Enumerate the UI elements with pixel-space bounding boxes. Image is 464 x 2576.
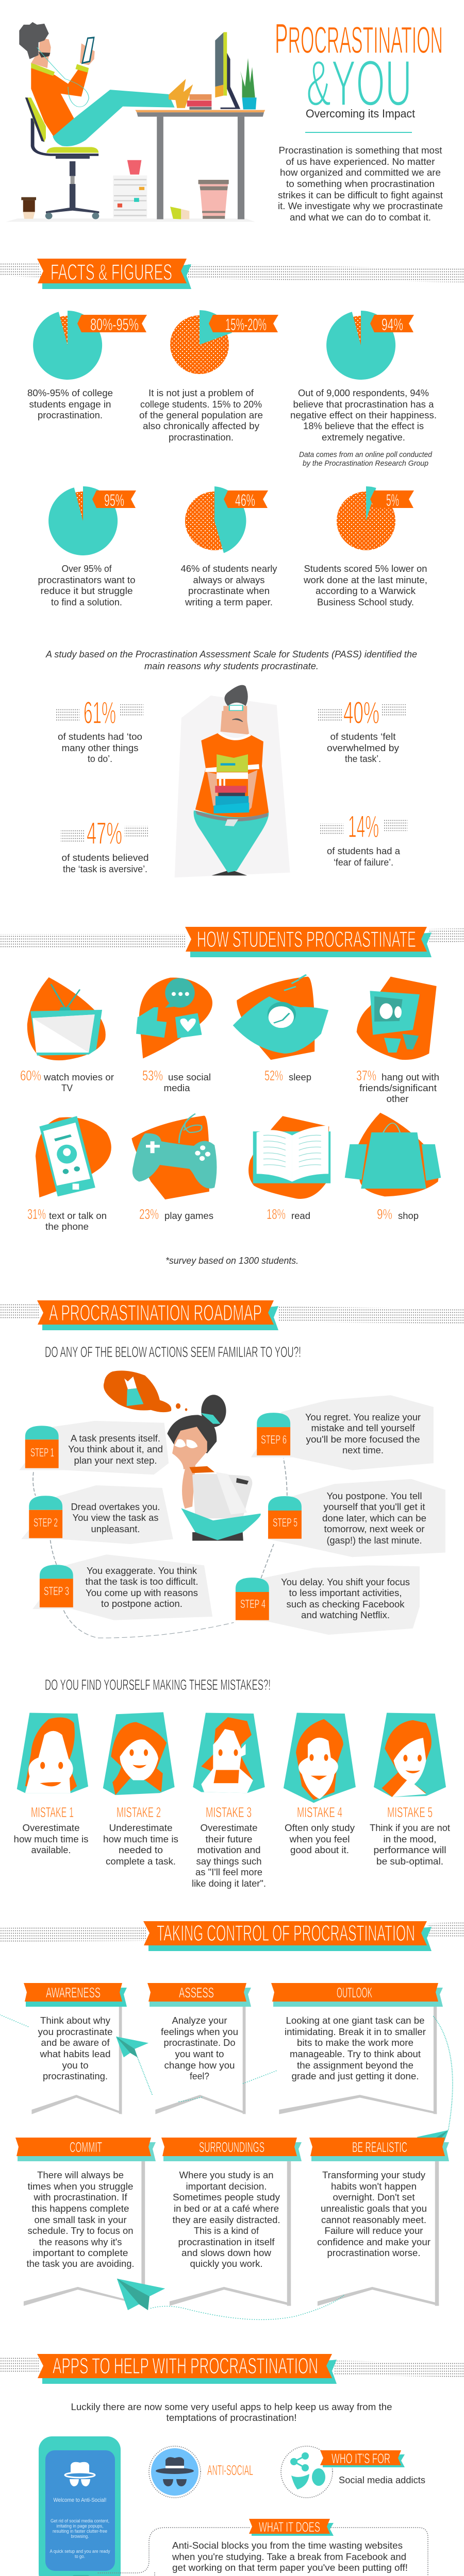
tip: Surroundings: SURROUNDINGS <box>199 2139 264 2155</box>
portrait 3 <box>193 1713 265 1793</box>
what it does: Anti-Social blocks you from the time wasting websites <box>172 2540 403 2551</box>
caption: 95%: to find a solution. <box>51 597 122 607</box>
step labels: STEP 5 <box>273 1516 297 1529</box>
step 4 text: to less important activities, <box>289 1588 402 1598</box>
caption: 15%-20%: of the general population are <box>139 410 263 420</box>
step 1 text: You think about it, and <box>68 1444 163 1454</box>
activity labels: use social <box>168 1072 211 1082</box>
tip: Awareness: Think about why <box>40 2015 110 2026</box>
mistake 5: MISTAKE 5 <box>387 1804 433 1820</box>
tip: Surroundings: quickly you work. <box>190 2259 263 2269</box>
caption: 80%-95%: procrastination. <box>38 410 103 420</box>
apps intro <box>71 2402 392 2423</box>
tip: Commit: with procrastination. If <box>33 2192 128 2202</box>
pie: 94%: 94% <box>382 315 403 334</box>
tip: Be Realistic: Transforming your study <box>322 2170 425 2180</box>
step markers <box>25 1413 302 1620</box>
tip: Outlook: grade and just getting it done. <box>292 2071 419 2081</box>
stat: 61%: 61% <box>84 696 116 730</box>
tip: Surroundings: Where you study is an <box>179 2170 273 2180</box>
activity labels: 31% <box>27 1206 46 1222</box>
step 3 text: to postpone action. <box>101 1599 183 1609</box>
mistake 3: like doing it later". <box>192 1878 266 1889</box>
step labels: STEP 6 <box>261 1433 287 1446</box>
portrait 4 <box>284 1713 356 1803</box>
tip: Outlook: intimidating. Break it in to smaller <box>285 2027 426 2037</box>
activity labels: shop <box>398 1211 419 1221</box>
intro text: and what we can do to combat it. <box>290 212 431 223</box>
tip: Commit: this happens complete <box>32 2204 129 2214</box>
icon: game controller <box>131 1114 217 1199</box>
step 1 text: A task presents itself. <box>71 1433 160 1444</box>
tip: Commit: important to complete <box>33 2248 128 2258</box>
source note: by the Procrastination Research Group <box>303 459 428 468</box>
intro text: to something when procrastination <box>286 179 435 189</box>
step 5 text: (gasp!) the last minute. <box>327 1535 422 1546</box>
mistake 2: needed to <box>119 1845 163 1855</box>
section banner: A Procrastination Roadmap <box>37 1300 278 1330</box>
caption: 95%: Over 95% of <box>62 564 112 574</box>
icon: spy app logo <box>149 2446 201 2498</box>
mistake 3 <box>192 1804 266 1889</box>
activity labels <box>20 1067 439 1232</box>
pie: 15%-20% <box>170 310 278 374</box>
caption: 46%: 46% of students nearly <box>180 564 277 574</box>
illustration: overwhelmed student holding books <box>175 685 290 877</box>
tip: Awareness <box>24 1983 127 2081</box>
icon: open book <box>248 1116 330 1199</box>
activity labels: text or talk on <box>49 1211 107 1221</box>
tip: Awareness: AWARENESS <box>46 1985 101 2001</box>
caption: 94%: Out of 9,000 respondents, 94% <box>298 388 429 398</box>
tip: Awareness: procrastinating. <box>43 2071 108 2081</box>
section banner: Apps to Help with Procrastination <box>37 2353 337 2384</box>
tip: Outlook: bits to make the work more <box>297 2038 413 2048</box>
activity labels: watch movies or <box>43 1072 114 1082</box>
tip: Surroundings: Sometimes people study <box>173 2192 280 2202</box>
tip: Commit: schedule. Try to focus on <box>28 2226 133 2236</box>
caption: 5%: Students scored 5% lower on <box>304 564 427 574</box>
activity labels: read <box>291 1211 310 1221</box>
stat: 47%: the ‘task is aversive’. <box>63 864 147 874</box>
mistake 3: as "I'll feel more <box>195 1867 262 1877</box>
phone screenshot: to go. <box>75 2554 85 2559</box>
tip: Be Realistic: Failure will reduce your <box>325 2226 423 2236</box>
pie: 80%-95%: 80%-95% <box>90 315 139 334</box>
stat: 40%: of students ‘felt <box>330 732 396 742</box>
step 6 text <box>305 1412 421 1455</box>
tip: Be Realistic: procrastination worse. <box>327 2248 421 2258</box>
stat: 61% <box>55 696 143 764</box>
mistake 2: Underestimate <box>109 1823 172 1833</box>
tip: Be Realistic: habits won't happen <box>331 2181 417 2192</box>
survey note: *survey based on 1300 students. <box>165 1256 299 1266</box>
step 3 text: that the task is too difficult. <box>86 1577 198 1587</box>
stat: 40%: the task’. <box>345 754 381 764</box>
study intro <box>45 649 417 671</box>
study intro: A study based on the Procrastination Assessment Scale for Students (PASS) identified the <box>45 649 417 659</box>
what it does: when you're studying. Take a break from Facebook and <box>172 2552 406 2562</box>
mistake 5: be sub-optimal. <box>376 1856 443 1867</box>
caption: 15%-20% <box>139 388 263 443</box>
step 2 text: You view the task as <box>72 1513 159 1523</box>
step 5 text: tomorrow, next week or <box>324 1524 425 1534</box>
stat: 40%: overwhelmed by <box>327 743 399 753</box>
caption: 5%: Business School study. <box>317 597 414 607</box>
tip: Awareness: you to <box>62 2060 89 2071</box>
icon: shopping bags <box>345 1113 441 1196</box>
step 4 text: such as checking Facebook <box>287 1599 405 1609</box>
icon: television <box>27 977 106 1060</box>
tip: Assess: procrastinate. Do <box>164 2038 235 2048</box>
tip: Be Realistic: BE REALISTIC <box>352 2139 407 2155</box>
step 4 text: and watching Netflix. <box>301 1610 390 1620</box>
mistake 5: in the mood, <box>384 1834 436 1844</box>
caption: 46% <box>180 564 277 607</box>
icon: paper plane two <box>417 2130 449 2151</box>
step labels <box>30 1433 297 1611</box>
activity labels: 52% <box>264 1067 283 1083</box>
step 6 text: You regret. You realize your <box>305 1412 421 1422</box>
bookmark frames with paper plane path <box>0 2007 453 2319</box>
pie: 94% <box>326 311 414 380</box>
stat: 61%: of students had ‘too <box>58 732 142 742</box>
tip: Commit: COMMIT <box>70 2139 102 2155</box>
tip: Commit: one small task in your <box>34 2215 127 2225</box>
tip: Be Realistic: cannot reasonably meet. <box>321 2215 426 2225</box>
tip: Assess: ASSESS <box>179 1985 214 2001</box>
tip: Outlook: manageable. Try to think about <box>290 2049 421 2059</box>
stat: 47%: 47% <box>87 816 122 851</box>
activity labels: 18% <box>267 1206 286 1222</box>
illustration: girl with laptop and steps backgrounds <box>19 1370 445 1638</box>
stat: 40% <box>318 696 406 764</box>
step 4 text <box>281 1577 410 1620</box>
tip: Outlook <box>271 1983 443 2081</box>
step labels: STEP 3 <box>44 1584 69 1598</box>
stat: 14%: of students had a <box>327 846 401 856</box>
apps intro: Luckily there are now some very useful apps to help keep us away from the <box>71 2402 392 2412</box>
step 2 text: unpleasant. <box>91 1524 140 1534</box>
tip: Assess: feel? <box>190 2071 209 2081</box>
caption: 15%-20%: procrastination. <box>169 432 234 443</box>
what it does: get working on that term paper you've been putting off! <box>172 2563 408 2573</box>
step 5 text: You postpone. You tell <box>327 1491 422 1501</box>
caption: 94%: believe that procrastination has a <box>293 399 435 410</box>
mistake 5 <box>370 1804 450 1867</box>
intro text: of us have experienced. No matter <box>286 157 435 167</box>
caption: 5%: work done at the last minute, <box>303 575 427 585</box>
who it's for: Social media addicts <box>339 2475 425 2485</box>
source note: Data comes from an online poll conducted <box>299 450 433 459</box>
icons: how students procrastinate <box>27 975 441 1199</box>
subtitle: Overcoming its Impact <box>306 107 415 120</box>
step 2 text: Dread overtakes you. <box>71 1502 160 1512</box>
caption: 80%-95%: 80%-95% of college <box>27 388 113 398</box>
tip: Assess: change how you <box>164 2060 235 2071</box>
caption: 95%: procrastinators want to <box>38 575 135 585</box>
caption: 15%-20%: college students. 15% to 20% <box>140 399 262 410</box>
pie: 5% <box>337 486 414 550</box>
caption: 15%-20%: also chronically affected by <box>143 421 259 431</box>
mistake 2 <box>103 1804 178 1867</box>
mistake 3: their future <box>205 1834 253 1844</box>
step 4 text: You delay. You shift your focus <box>281 1577 410 1587</box>
icon: social media <box>136 977 212 1058</box>
tip: Surroundings: This is a kind of <box>194 2226 259 2236</box>
stat: 40%: 40% <box>343 696 379 730</box>
mistake 5: Think if you are not <box>370 1823 450 1833</box>
stat: 14% <box>319 809 407 868</box>
portrait 5 <box>374 1713 446 1797</box>
phone screenshot <box>39 2436 121 2576</box>
activity labels: media <box>164 1083 191 1093</box>
activity labels: 9% <box>377 1206 392 1222</box>
stat: 47%: of students believed <box>62 853 148 863</box>
mistake 4 <box>285 1804 355 1855</box>
app: Anti-Social <box>39 2436 428 2576</box>
mistake 4: good about it. <box>290 1845 349 1855</box>
tip: Awareness: you procrastinate <box>38 2027 112 2037</box>
mistake 4: MISTAKE 4 <box>297 1804 342 1820</box>
tip: Outlook: the assignment beyond the <box>297 2060 413 2071</box>
tip: Surroundings: important decision. <box>186 2181 267 2192</box>
stat: 61%: to do’. <box>88 754 112 764</box>
mistake 1: Overestimate <box>23 1823 79 1833</box>
mistake 4: when you feel <box>289 1834 350 1844</box>
step 2 text <box>71 1502 160 1534</box>
portraits: five mistake faces <box>17 1712 446 1803</box>
phone screenshot: irritating in page popups, <box>57 2523 103 2529</box>
mistake 2: how much time is <box>103 1834 178 1844</box>
step 5 text: yourself that you'll get it <box>324 1502 425 1512</box>
section banner: Facts & Figures <box>37 259 191 289</box>
step 3 text: You come up with reasons <box>86 1588 198 1598</box>
step 6 text: you'll be more focused the <box>306 1434 420 1445</box>
caption: 94%: 18% believe that the effect is <box>303 421 424 431</box>
apps intro: temptations of procrastination! <box>166 2413 297 2423</box>
step labels: STEP 4 <box>240 1597 266 1611</box>
pie: 46%: 46% <box>235 491 255 510</box>
phone screenshot: Get rid of social media content, <box>51 2518 109 2523</box>
what it does <box>98 2519 428 2576</box>
step labels: STEP 2 <box>34 1516 58 1529</box>
tip: Surroundings: in bed or at a café where <box>174 2204 279 2214</box>
study intro: main reasons why students procrastinate. <box>144 661 319 671</box>
stat: 14%: ‘fear of failure’. <box>334 857 393 868</box>
tip: Assess: feelings when you <box>161 2027 238 2037</box>
tip: Surroundings <box>161 2138 302 2269</box>
caption: 80%-95%: students engage in <box>29 399 111 410</box>
tip: Commit: the reasons why it's <box>39 2237 122 2247</box>
tip: Awareness: what habits lead <box>39 2049 110 2059</box>
activity labels: friends/significant <box>359 1083 437 1093</box>
intro text <box>278 145 443 223</box>
step 6 text: next time. <box>342 1445 384 1455</box>
tip: Assess: Analyze your <box>172 2015 227 2026</box>
phone screenshot: Welcome to Anti-Social! <box>54 2497 106 2503</box>
mistake 2: MISTAKE 2 <box>117 1804 161 1820</box>
icon: pillow and alarm clock <box>233 975 328 1060</box>
tip: Surroundings: they are easily distracted. <box>172 2215 280 2225</box>
pie: 95%: 95% <box>104 491 124 510</box>
who it's for: WHO IT'S FOR <box>332 2451 390 2466</box>
tip: Outlook: OUTLOOK <box>337 1985 372 2001</box>
caption: 46%: always or always <box>193 575 265 585</box>
tip: Assess <box>147 1983 251 2081</box>
caption: 15%-20%: It is not just a problem of <box>148 388 254 398</box>
tip: Commit: the task you are avoiding. <box>27 2259 134 2269</box>
icon: smartphone <box>36 1116 111 1197</box>
tip: Outlook: Looking at one giant task can be <box>286 2015 425 2026</box>
mistake 5: performance will <box>373 1845 446 1855</box>
section banner: Facts & Figures: FACTS & FIGURES <box>51 260 172 285</box>
tip: Assess: you want to <box>175 2049 224 2059</box>
caption: 5%: according to a Warwick <box>316 586 416 596</box>
caption: 94%: negative effect on their happiness. <box>290 410 437 420</box>
caption: 46%: writing a term paper. <box>185 597 273 607</box>
tip: Be Realistic <box>309 2138 449 2258</box>
mistake 3: say things such <box>196 1856 262 1867</box>
activity labels: other <box>387 1094 409 1104</box>
tip: Commit <box>15 2138 156 2269</box>
caption: 5% <box>303 564 427 607</box>
mistake 3: MISTAKE 3 <box>206 1804 252 1820</box>
caption: 95% <box>38 564 135 607</box>
step 3 text <box>86 1566 198 1609</box>
icon: paper plane one <box>116 2037 148 2057</box>
step 6 text: mistake and tell yourself <box>311 1423 416 1433</box>
intro text: it. We investigate why we procrastinate <box>278 201 443 211</box>
app name: ANTI-SOCIAL <box>207 2462 253 2478</box>
caption: 95%: reduce it but struggle <box>40 586 133 596</box>
mistake 3: Overestimate <box>200 1823 258 1833</box>
caption: 46%: procrastinate when <box>188 586 270 596</box>
pie: 80%-95% <box>33 311 147 380</box>
pie: 95% <box>48 486 136 555</box>
stat: 47% <box>61 816 149 874</box>
step 1 text <box>68 1433 163 1466</box>
pie: 5%: 5% <box>386 491 399 510</box>
activity labels: the phone <box>45 1222 89 1232</box>
subheading: mistakes question: DO YOU FIND YOURSELF MAKING THESE MISTAKES?! <box>45 1677 271 1693</box>
pie: 15%-20%: 15%-20% <box>225 315 267 334</box>
step background bubbles <box>19 1395 445 1635</box>
intro text: how organized and committed we are <box>280 167 441 178</box>
intro text: strikes it can be difficult to fight against <box>278 190 443 200</box>
tip: Be Realistic: confidence and make your <box>317 2237 430 2247</box>
stat: 61%: many other things <box>62 743 138 753</box>
step 5 text: done later, which can be <box>322 1513 426 1523</box>
tip: Awareness: and be aware of <box>41 2038 110 2048</box>
activity labels: TV <box>61 1083 73 1093</box>
what it does: WHAT IT DOES <box>259 2519 320 2535</box>
tip: Commit: There will always be <box>37 2170 124 2180</box>
stat: 14%: 14% <box>348 809 379 844</box>
step labels: STEP 1 <box>30 1446 54 1459</box>
mistake 3: motivation and <box>197 1845 261 1855</box>
step 1 text: plan your next step. <box>74 1455 157 1466</box>
section banner: A Procrastination Roadmap: A PROCRASTINATION ROADMAP <box>49 1300 262 1326</box>
icon: photos of friends and drinks <box>357 977 437 1060</box>
pie: 46% <box>185 486 268 553</box>
panel: facts and figures pies <box>27 310 437 607</box>
source note <box>299 450 433 468</box>
mistake 1: how much time is <box>13 1834 89 1844</box>
mistake 1: MISTAKE 1 <box>31 1804 74 1820</box>
caption: 94%: extremely negative. <box>322 432 405 443</box>
portrait 1 <box>17 1713 88 1793</box>
activity labels: hang out with <box>382 1072 439 1082</box>
tip: Surroundings: procrastination in itself <box>178 2237 275 2247</box>
phone screenshot: browsing. <box>71 2534 89 2539</box>
tip: Be Realistic: overnight. Don't set <box>333 2192 415 2202</box>
activity labels: 53% <box>142 1067 163 1083</box>
title <box>275 14 443 120</box>
caption: 94% <box>290 388 437 443</box>
activity labels: 60% <box>20 1067 41 1083</box>
portrait 2 <box>103 1712 175 1795</box>
phone screenshot: resulting in faster clutter-free <box>53 2529 107 2534</box>
activity labels: play games <box>164 1211 213 1221</box>
tip: Commit: times when you struggle <box>28 2181 133 2192</box>
step 5 text <box>322 1491 426 1546</box>
activity labels: 23% <box>139 1206 159 1222</box>
caption: 80%-95% <box>27 388 113 420</box>
phone screenshot: A quick setup and you are ready <box>49 2549 110 2554</box>
panel: hero illustration of student with feet on desk <box>6 22 265 222</box>
icon: paper plane three <box>117 2279 165 2310</box>
mistake 4: Often only study <box>285 1823 355 1833</box>
connectors: dashed roadmap path <box>33 1459 287 1638</box>
mistake 1: available. <box>31 1845 71 1855</box>
step 3 text: You exaggerate. You think <box>87 1566 197 1576</box>
activity labels: sleep <box>289 1072 311 1082</box>
mistake 2: complete a task. <box>106 1856 176 1867</box>
who it's for <box>281 2446 425 2498</box>
intro text: Procrastination is something that most <box>278 145 442 156</box>
tip: Surroundings: and slows down how <box>181 2248 272 2258</box>
mistake 1 <box>13 1804 89 1855</box>
tip: Be Realistic: unrealistic goals that you <box>321 2204 427 2214</box>
activity labels: 37% <box>356 1067 376 1083</box>
